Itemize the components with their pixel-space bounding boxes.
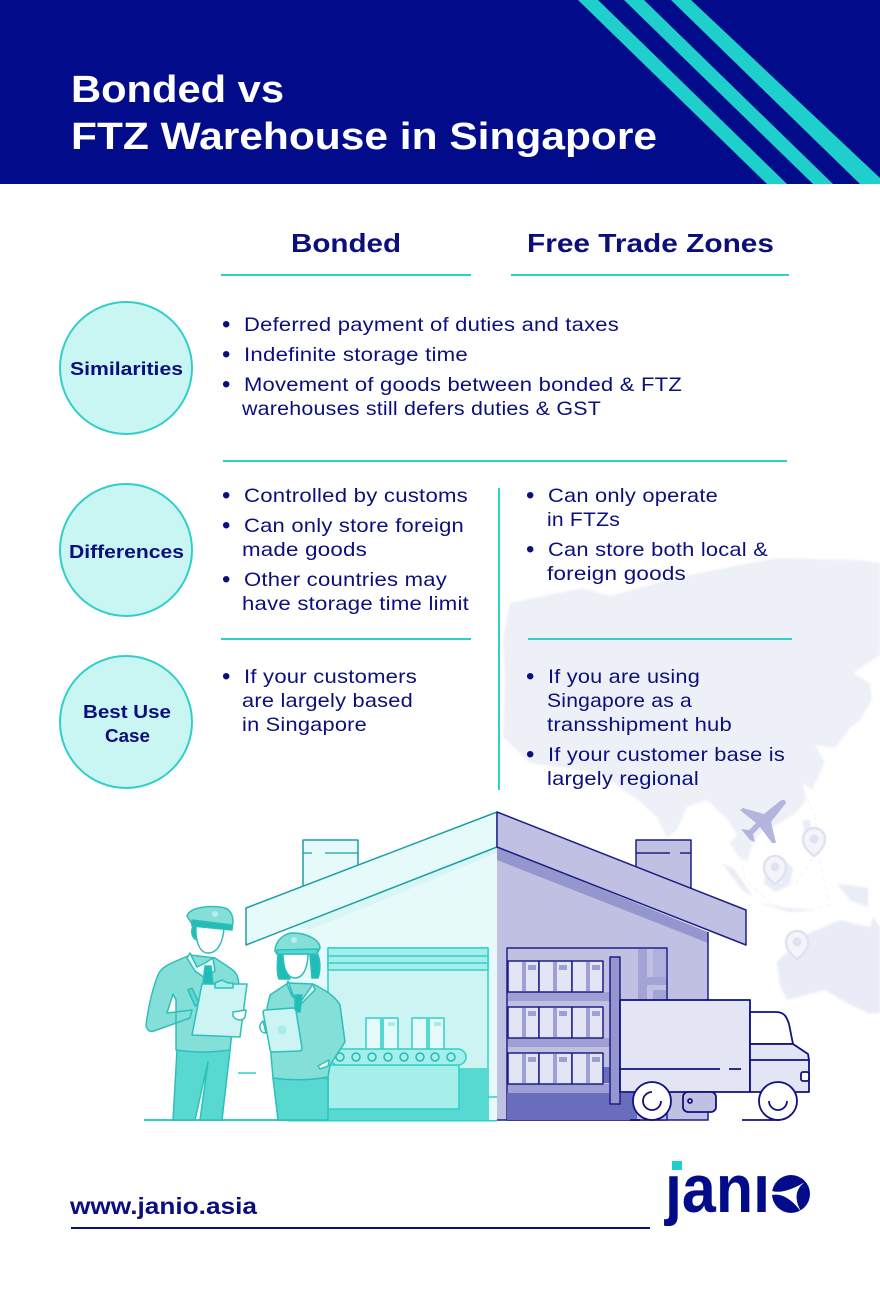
title (71, 69, 657, 158)
officer: man (146, 907, 247, 1120)
best use: bonded (222, 663, 417, 736)
best use: bonded: in Singapore (242, 714, 367, 736)
best use: free trade zones: • (526, 663, 534, 690)
column heading: Free Trade Zones: Free Trade Zones (527, 228, 774, 258)
column heading: Bonded: Bonded (291, 228, 401, 258)
best use: bonded: • (222, 663, 230, 690)
title: Bonded vs (71, 69, 284, 111)
similarities text (222, 311, 682, 420)
circle: Best Use Case: Best Use (83, 701, 171, 722)
differences: free trade zones: • (526, 482, 534, 509)
differences: free trade zones: foreign goods (547, 563, 686, 585)
similarities text: Movement of goods between bonded & FTZ (244, 374, 682, 396)
similarities text: • (222, 341, 230, 368)
website url: www.janio.asia (69, 1193, 257, 1219)
title: FTZ Warehouse in Singapore (71, 116, 657, 158)
circle: Best Use Case: Case (105, 725, 150, 746)
best use: free trade zones (526, 663, 785, 790)
best use: free trade zones: transshipment hub (547, 714, 732, 736)
background world map (503, 558, 880, 1013)
circle: Differences (60, 484, 192, 616)
ground line (144, 1119, 497, 1122)
best use: free trade zones: Singapore as a (547, 690, 692, 712)
icon: airplane (740, 800, 786, 843)
differences: bonded: have storage time limit (242, 593, 469, 615)
best use: free trade zones: largely regional (547, 768, 699, 790)
logo: janio: jani (663, 1151, 770, 1227)
best use: free trade zones: • (526, 741, 534, 768)
warehouse: free trade zone half (497, 812, 746, 1120)
similarities text: Indefinite storage time (244, 344, 468, 366)
similarities text: • (222, 311, 230, 338)
differences: bonded: • (222, 566, 230, 593)
differences: bonded: made goods (242, 539, 367, 561)
similarities text: warehouses still defers duties & GST (241, 398, 601, 420)
header band (0, 0, 880, 184)
differences: bonded: Controlled by customs (244, 485, 468, 507)
circle: Similarities: Similarities (70, 358, 183, 379)
similarities text: • (222, 371, 230, 398)
icons: map pins (764, 828, 825, 959)
differences: bonded: • (222, 482, 230, 509)
delivery truck (620, 1000, 809, 1120)
differences: free trade zones: • (526, 536, 534, 563)
best use: bonded: are largely based (242, 690, 413, 712)
similarities text: Deferred payment of duties and taxes (244, 314, 619, 336)
circle: Best Use Case (60, 656, 192, 788)
best use: free trade zones: If your customer base is (548, 744, 785, 766)
differences: free trade zones (526, 482, 768, 585)
differences: free trade zones: Can only operate (548, 485, 718, 507)
circle: Similarities (60, 302, 192, 434)
map route dashes (740, 790, 830, 912)
warehouse: bonded half (238, 812, 497, 1120)
differences: bonded: Other countries may (244, 569, 447, 591)
circle: Differences: Differences (69, 541, 184, 562)
best use: bonded: If your customers (244, 666, 417, 688)
best use: free trade zones: If you are using (548, 666, 700, 688)
differences: bonded: • (222, 512, 230, 539)
differences: free trade zones: in FTZs (547, 509, 620, 531)
differences: free trade zones: Can store both local & (548, 539, 768, 561)
header diagonal stripes (578, 0, 880, 184)
differences: bonded (222, 482, 469, 615)
officer: woman (260, 933, 345, 1120)
differences: bonded: Can only store foreign (244, 515, 464, 537)
